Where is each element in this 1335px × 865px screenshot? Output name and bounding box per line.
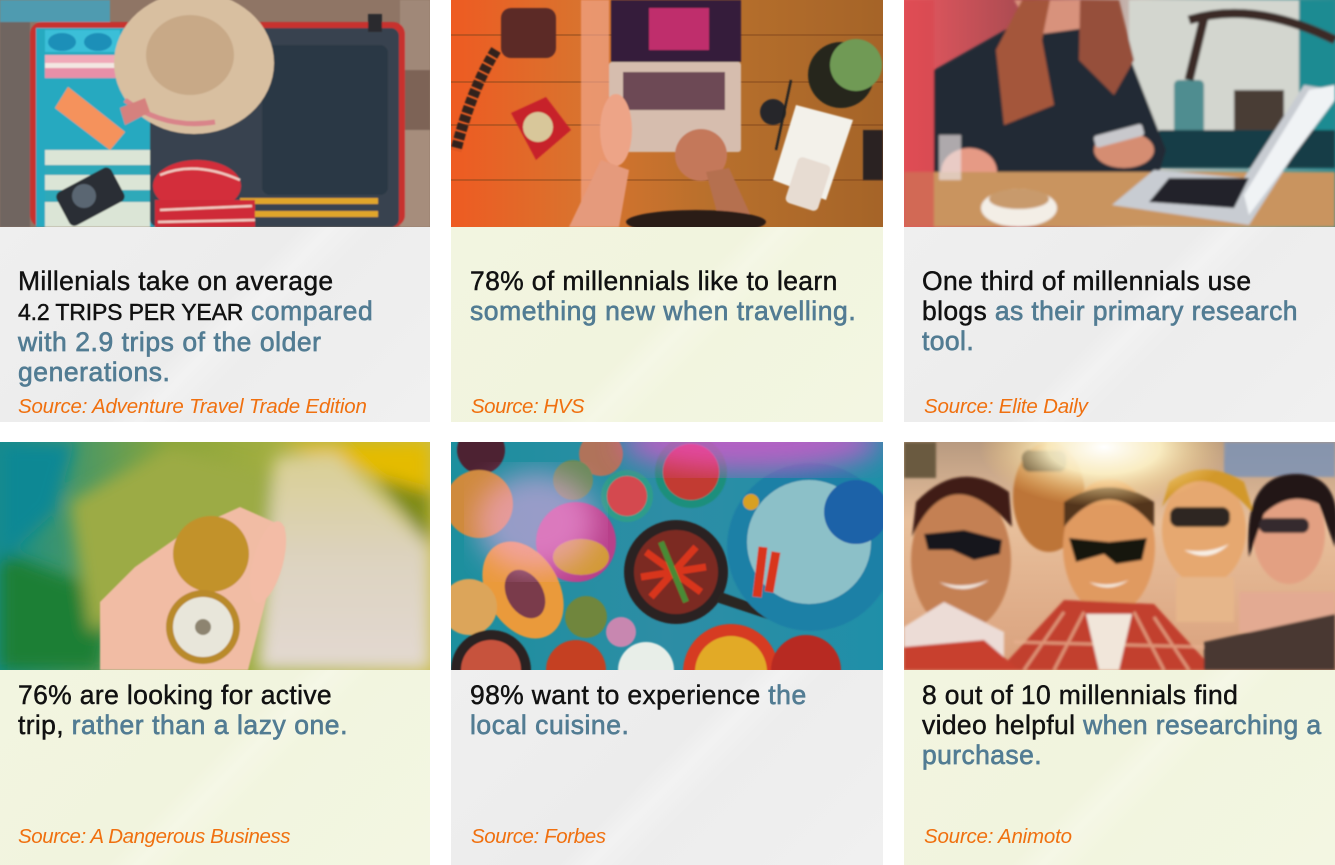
- photo: laptop on wooden desk: [451, 0, 883, 227]
- fact text: [470, 266, 856, 326]
- fact text: 76% are looking for active: [18, 680, 332, 710]
- text panel: [0, 670, 430, 865]
- source: Source: Animoto: [924, 825, 1072, 848]
- fact text: [18, 680, 348, 740]
- fact text: generations.: [18, 357, 170, 387]
- source: Source: HVS: [471, 395, 584, 418]
- panel: active trip: [0, 442, 430, 865]
- fact text: purchase.: [922, 740, 1042, 770]
- photo: colourful food table: [451, 442, 883, 670]
- fact text: 78% of millennials like to learn: [470, 266, 838, 296]
- source: Source: Forbes: [471, 825, 606, 848]
- panel: local cuisine: [451, 442, 883, 865]
- photo: hand holding compass: [0, 442, 430, 670]
- source: Source: Adventure Travel Trade Edition: [18, 395, 367, 418]
- fact text: 8 out of 10 millennials find: [922, 680, 1238, 710]
- text panel: [0, 227, 430, 422]
- photo: group selfie with sunglasses: [904, 442, 1335, 670]
- source: Source: Elite Daily: [924, 395, 1088, 418]
- fact text: trip, rather than a lazy one.: [18, 710, 348, 740]
- fact text: [922, 266, 1298, 356]
- photo: open suitcase with hat: [0, 0, 430, 227]
- fact text: blogs as their primary research: [922, 296, 1298, 326]
- fact text: video helpful when researching a: [922, 710, 1322, 740]
- panel: video helpful: [904, 442, 1335, 865]
- fact text: tool.: [922, 326, 974, 356]
- source: Source: A Dangerous Business: [18, 825, 290, 848]
- panel: trips per year: [0, 0, 430, 422]
- fact text: Millenials take on average: [18, 266, 334, 296]
- fact text: [470, 680, 807, 740]
- panel: learn something new: [451, 0, 883, 422]
- fact text: local cuisine.: [470, 710, 629, 740]
- text panel: [451, 670, 883, 865]
- text panel: [904, 227, 1335, 422]
- photo: woman with phone and laptop: [904, 0, 1335, 227]
- fact text: something new when travelling.: [470, 296, 856, 326]
- text panel: [451, 227, 883, 422]
- fact text: One third of millennials use: [922, 266, 1251, 296]
- text panel: [904, 670, 1335, 865]
- fact text: with 2.9 trips of the older: [18, 327, 322, 357]
- fact text: 98% want to experience the: [470, 680, 807, 710]
- panel: blogs research: [904, 0, 1335, 422]
- fact text: [18, 266, 373, 387]
- fact text: 4.2 TRIPS PER YEAR compared: [18, 296, 373, 326]
- fact text: [922, 680, 1322, 770]
